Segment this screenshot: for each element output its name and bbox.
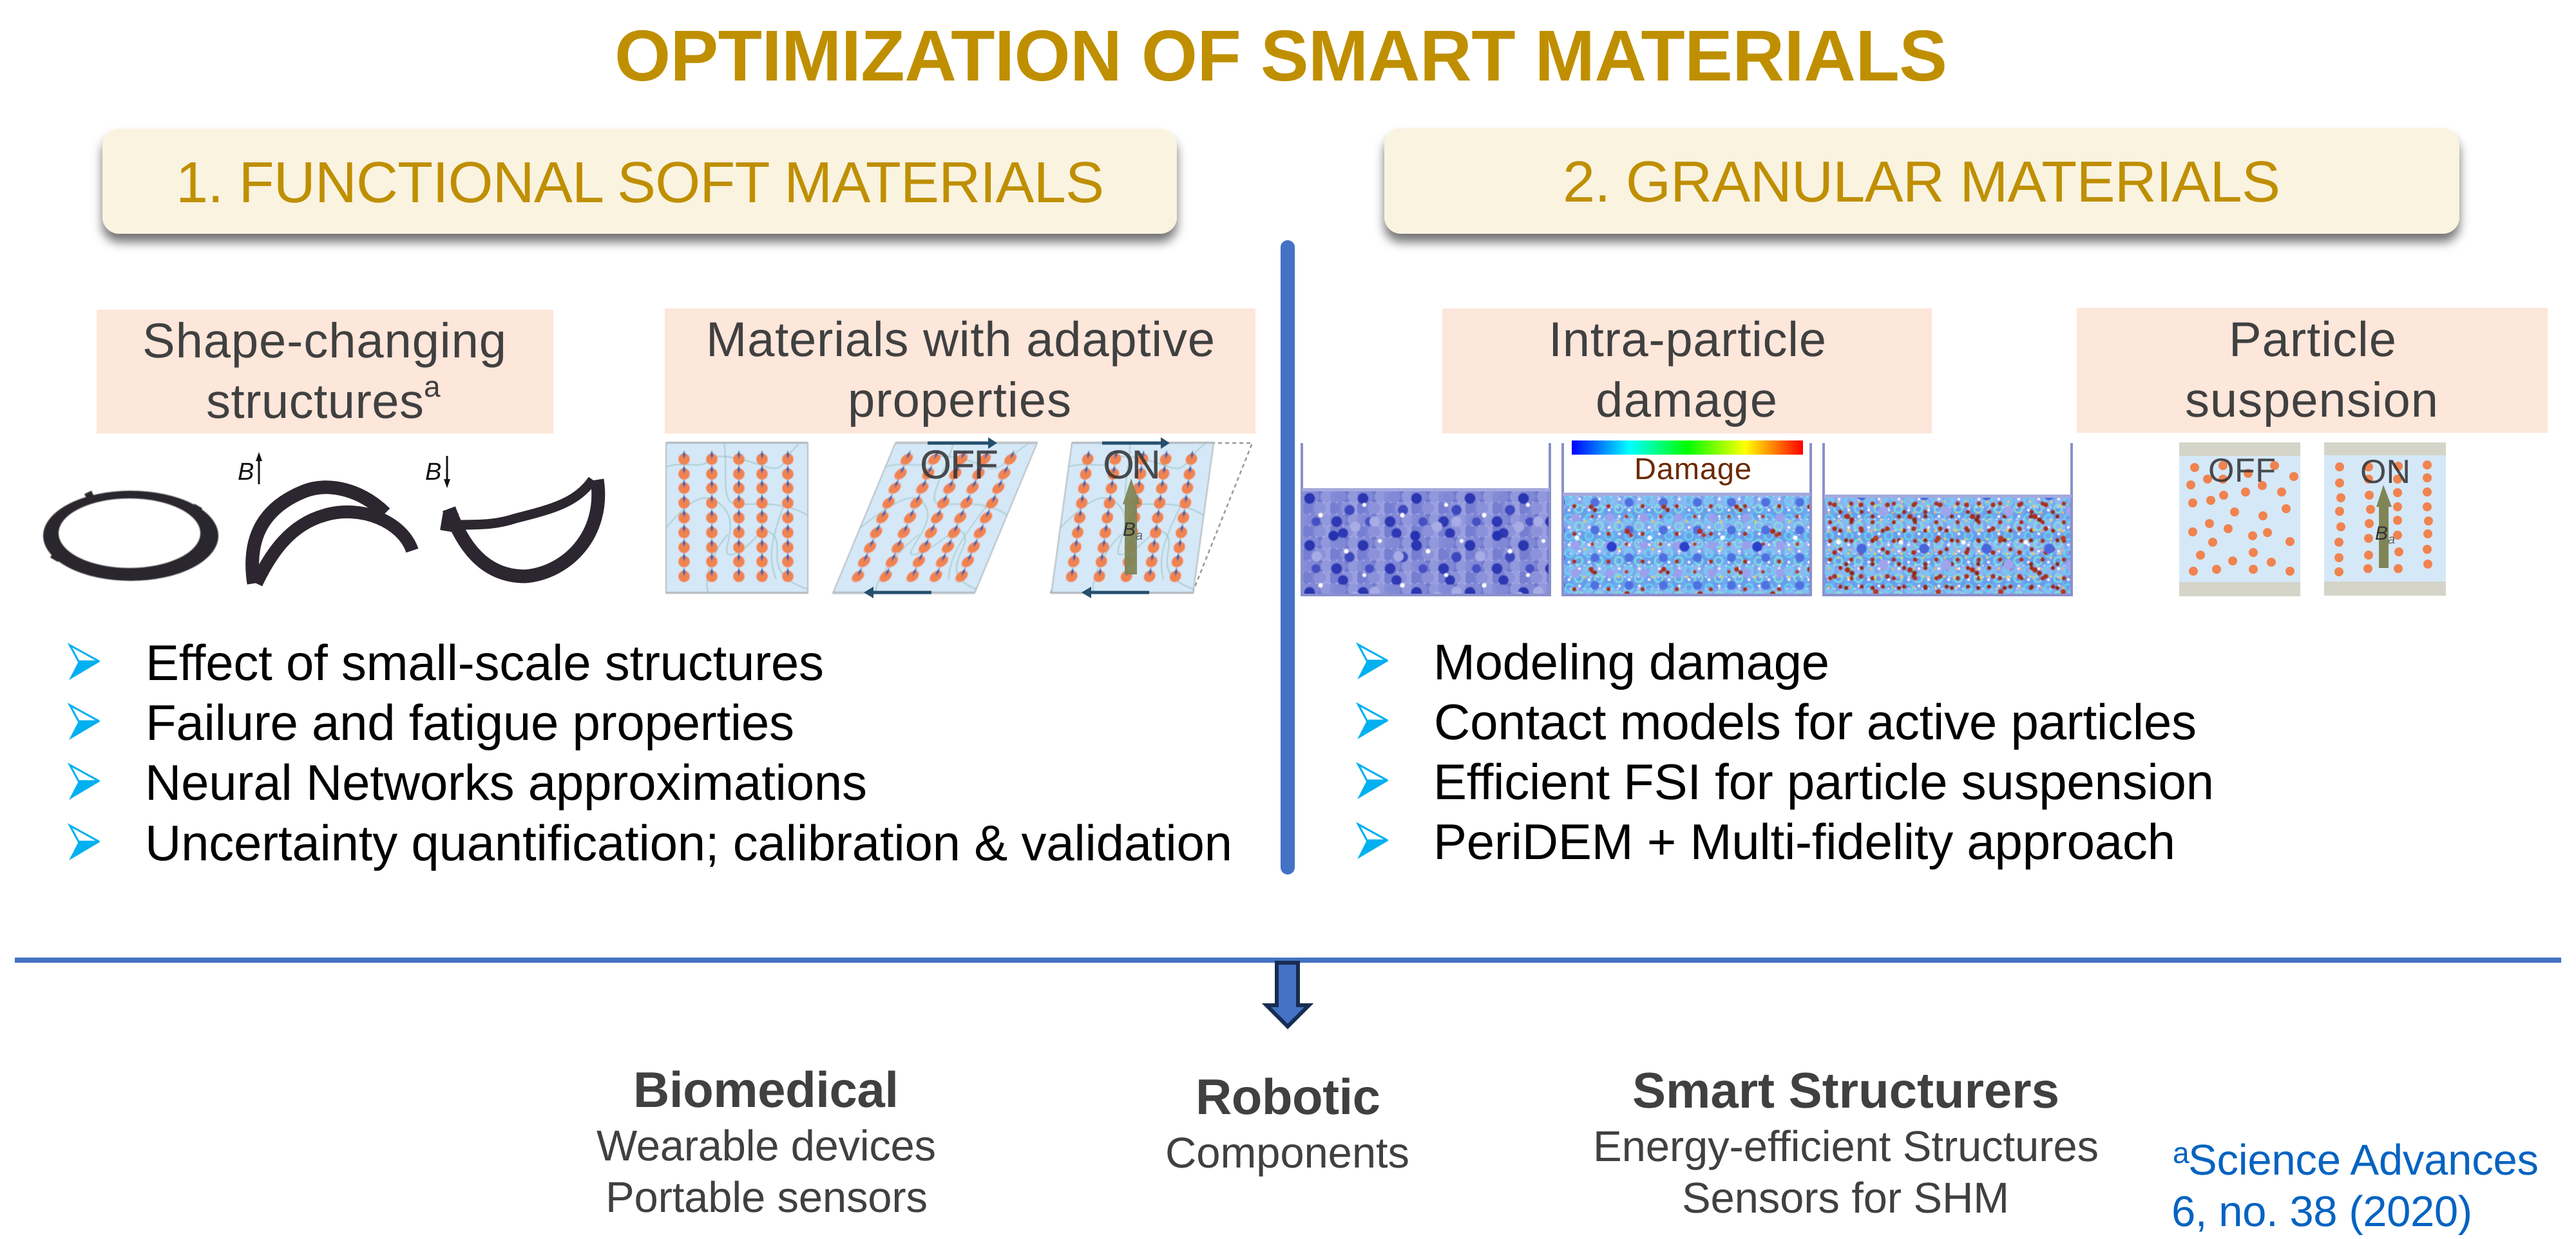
- heading: intra-particle damage: [1442, 308, 1932, 433]
- application: smart structurers: [1593, 1062, 2099, 1222]
- bullet list: functional soft materials: Failure and fatigue properties: [146, 694, 794, 751]
- citation: [2171, 1136, 2539, 1236]
- bullet list: granular materials: PeriDEM + Multi-fidelity approach: [1433, 813, 2175, 870]
- heading: particle suspension: [2077, 308, 2548, 433]
- arrow: down to applications: [1266, 963, 1309, 1026]
- bullet list: functional soft materials: [69, 634, 1232, 871]
- diagram: suspension, field on: [2324, 442, 2446, 596]
- image: ring bent under downward field: B: [425, 459, 441, 486]
- heading: shape-changing structures: a: [424, 370, 441, 403]
- section header: granular materials: 2. GRANULAR MATERIALS: [1563, 150, 2280, 214]
- panel: particle suspension: [2077, 308, 2548, 596]
- diagram: sheared material, field off: [833, 437, 1038, 598]
- bullet list: functional soft materials: Neural Networks approximations: [145, 754, 867, 811]
- diagram: undeformed material: [666, 442, 808, 594]
- image: ring bent under upward field: [238, 452, 412, 583]
- diagram: suspension, field on: ON: [2360, 453, 2410, 491]
- section header: granular materials: [1384, 128, 2459, 234]
- application: biomedical: Biomedical: [633, 1061, 899, 1118]
- simulation: undamaged particle bed: [1302, 443, 1550, 595]
- simulation: heavily damaged particle bed: [1824, 443, 2072, 595]
- application: smart structurers: Sensors for SHM: [1682, 1174, 2009, 1222]
- application: robotic: Components: [1165, 1129, 1409, 1177]
- heading: materials with adaptive properties: Materials with adaptive: [706, 312, 1215, 367]
- diagram: suspension, field off: OFF: [2208, 452, 2276, 489]
- bullet list: granular materials: Modeling damage: [1433, 634, 1829, 690]
- panel: materials with adaptive properties: [665, 308, 1255, 598]
- bullet list: functional soft materials: Uncertainty quantification; calibration & validation: [145, 815, 1232, 871]
- simulation: partially damaged particle bed: [1563, 443, 1811, 595]
- section header: functional soft materials: 1. FUNCTIONAL SOFT MATERIALS: [176, 151, 1104, 215]
- bullet list: granular materials: Efficient FSI for particle suspension: [1433, 753, 2214, 810]
- application: biomedical: Portable sensors: [606, 1173, 928, 1222]
- diagram: sheared material, field on: a: [1136, 529, 1143, 543]
- application: smart structurers: Energy-efficient Structures: [1593, 1122, 2099, 1171]
- image: flat ring: [43, 491, 218, 581]
- heading: particle suspension: Particle: [2229, 312, 2396, 367]
- heading: intra-particle damage: Intra-particle: [1549, 312, 1826, 367]
- diagram: sheared material, field on: ON: [1103, 442, 1161, 487]
- diagram: sheared material, field on: [1051, 437, 1252, 598]
- bullet list: granular materials: [1357, 634, 2214, 870]
- panel: intra-particle damage: [1302, 308, 2072, 595]
- heading: shape-changing structures: structures: [206, 374, 424, 429]
- heading: materials with adaptive properties: [665, 308, 1255, 433]
- image: ring bent under downward field: [425, 456, 598, 576]
- image: ring bent under upward field: B: [238, 459, 254, 486]
- heading: materials with adaptive properties: properties: [848, 373, 1071, 428]
- bullet list: granular materials: Contact models for active particles: [1434, 694, 2197, 750]
- horizontal divider: [15, 958, 2561, 963]
- application: biomedical: Wearable devices: [596, 1122, 936, 1170]
- diagram: suspension, field off: [2179, 442, 2300, 596]
- colorbar: damage legend: Damage: [1634, 451, 1751, 486]
- diagram: suspension, field on: B: [2375, 523, 2388, 544]
- section header: functional soft materials: [102, 129, 1177, 234]
- application: robotic: [1165, 1068, 1409, 1177]
- heading: shape-changing structures: Shape-changing: [142, 314, 506, 368]
- bullet list: functional soft materials: Effect of small-scale structures: [146, 634, 824, 691]
- application: robotic: Robotic: [1196, 1068, 1380, 1125]
- title: OPTIMIZATION OF SMART MATERIALS: [615, 15, 1947, 96]
- heading: shape-changing structures: [97, 310, 553, 433]
- citation: a: [2173, 1136, 2190, 1169]
- citation: 6, no. 38 (2020): [2171, 1187, 2472, 1236]
- colorbar: damage legend: [1572, 440, 1803, 486]
- diagram: sheared material, field off: OFF: [920, 442, 998, 487]
- heading: particle suspension: suspension: [2185, 373, 2438, 428]
- citation: Science Advances: [2188, 1136, 2539, 1184]
- panel: shape-changing structures: [43, 310, 598, 583]
- diagram: sheared material, field on: B: [1123, 519, 1136, 540]
- application: biomedical: [596, 1061, 936, 1222]
- diagram: suspension, field on: a: [2388, 533, 2395, 547]
- application: smart structurers: Smart Structurers: [1632, 1062, 2059, 1119]
- vertical divider: [1281, 240, 1295, 875]
- heading: intra-particle damage: damage: [1596, 373, 1777, 428]
